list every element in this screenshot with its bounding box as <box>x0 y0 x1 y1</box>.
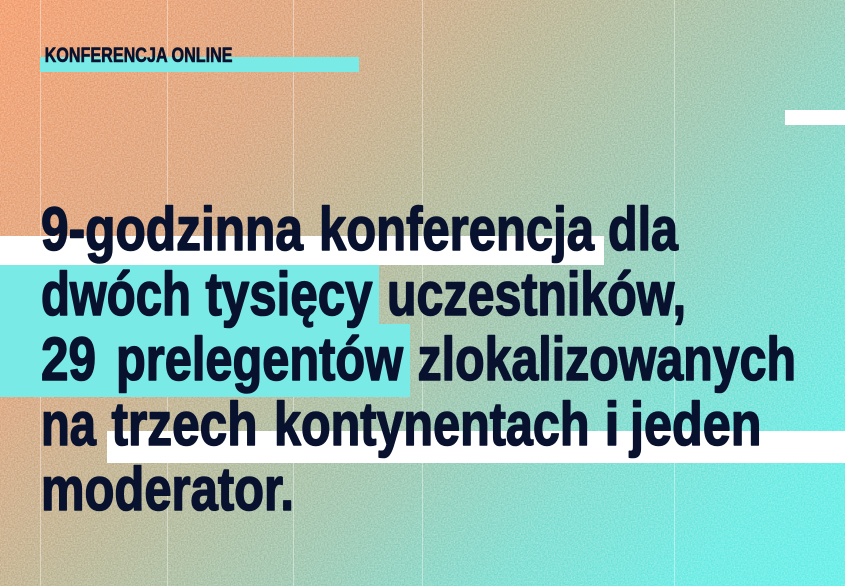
headline text: uczestników, <box>387 260 686 328</box>
decorative white tab at right edge <box>785 110 845 125</box>
headline text: dla <box>608 195 679 263</box>
headline text <box>41 195 796 523</box>
highlight: cyan block behind lines two and three <box>0 265 410 397</box>
headline text: dwóch <box>41 260 191 328</box>
headline text: jeden <box>629 390 762 458</box>
headline text: na <box>41 390 97 458</box>
headline text: trzech <box>112 390 258 458</box>
headline text: tysięcy <box>206 260 373 328</box>
highlight: white bar behind line one <box>0 236 604 265</box>
headline text: kontynentach <box>274 390 590 458</box>
kicker: label with highlight bar <box>40 44 359 72</box>
headline text: 29 <box>41 325 96 393</box>
headline text: i <box>604 390 620 458</box>
headline text: moderator. <box>41 455 294 523</box>
highlight: white bar behind line four <box>107 431 845 463</box>
headline text: 9-godzinna <box>41 195 304 263</box>
headline text: konferencja <box>319 195 595 263</box>
headline text: prelegentów <box>116 325 403 393</box>
headline with highlight blocks <box>0 195 845 523</box>
kicker: label with highlight bar: KONFERENCJA ONLINE <box>45 44 233 67</box>
